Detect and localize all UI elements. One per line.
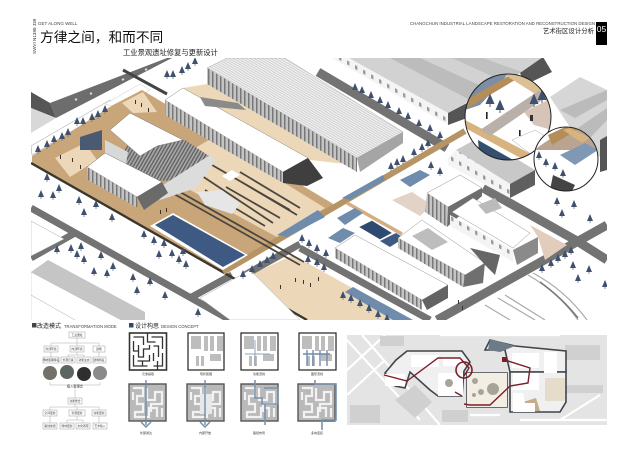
curved rails bottom right [485, 273, 587, 320]
concept row 2 captions: 路径布局 [253, 430, 265, 435]
grey hall upper right [330, 57, 552, 125]
flowchart: transformation mode: 工业遗址 [71, 333, 83, 337]
flowchart: transformation mode: 外部环境 [45, 347, 57, 351]
black boundary line [31, 163, 307, 320]
main reflecting pool [150, 213, 248, 270]
page number tab: 05 [597, 24, 606, 34]
long white-roof hall [165, 88, 323, 186]
plaza: tan ground [32, 90, 335, 272]
title: 方律之间，和而不同 [40, 30, 163, 45]
flowchart: transformation mode: 艺术植入 [94, 424, 106, 428]
flowchart: transformation mode: 功能更新 [93, 411, 105, 415]
white lattice over tracks [197, 190, 240, 214]
top-left building and facade [31, 58, 172, 155]
concept row 2 captions: 内部开放 [199, 430, 211, 435]
long south hall [335, 235, 448, 310]
flowchart: transformation mode [43, 332, 107, 429]
heading: design concept: DESIGN CONCEPT [161, 324, 199, 329]
flowchart: transformation mode: 文化再现 [77, 424, 89, 428]
heading: transformation mode: 改造模式 [37, 322, 61, 330]
hall with courtyard [398, 220, 500, 287]
plaza: pale sand areas [55, 84, 410, 320]
site plan: project boundary outlines [385, 340, 566, 412]
concept row 2 captions: 外部通达 [140, 430, 152, 435]
header: english project name: CHANGCHUN INDUSTRIAL LANDSCAPE RESTORATION AND RECONSTRUCTION DESIGN [410, 21, 595, 26]
site plan: round plaza features [445, 378, 499, 397]
flowchart: transformation mode: 场地肌理特征 [43, 358, 60, 362]
tan diagonal promenade [223, 131, 465, 272]
pair of small plaza halls and steel structure [80, 113, 216, 210]
header: english tagline: GET ALONG WELL [38, 21, 78, 26]
concept row 2: maze overlays and arrows [129, 380, 336, 430]
flowchart: transformation mode: 景观更新 [71, 411, 83, 415]
concept row 1 captions: 功能流线 [253, 371, 265, 376]
flowchart: transformation mode: 建筑 [96, 347, 102, 351]
heading: transformation mode: TRANSFORMATION MODE [64, 324, 117, 329]
flowchart: transformation mode: 路线重组 [44, 424, 56, 428]
heading: design concept: 设计构思 [135, 322, 159, 330]
heading: design concept [129, 322, 199, 330]
small steel-blue pools [277, 170, 430, 320]
rail tracks [167, 165, 304, 265]
panel: main isometric axonometric drawing [31, 57, 608, 323]
ground: white base [31, 58, 607, 320]
site plan: white building footprints [385, 352, 565, 412]
small people figures [60, 100, 463, 310]
header: vertical code: SWVI N1398 J39 [32, 18, 37, 54]
magnifier circle 1 [464, 74, 552, 160]
subtitle: 工业景观遗址修复与更新设计 [123, 48, 218, 57]
grey hall right edge [550, 77, 607, 172]
outlined white plots [31, 221, 300, 320]
flowchart: transformation mode: 内部环境 [71, 347, 83, 351]
flowchart: transformation mode: 功能整合 [69, 399, 81, 403]
site plan: red circulation route [384, 358, 530, 405]
bottom-left grey-roof building [31, 260, 145, 322]
flowchart: transformation mode: 场地更新 [61, 424, 73, 428]
flowchart: transformation mode: 功能业态 [78, 358, 90, 362]
corrugated large hall [207, 58, 403, 172]
header: chapter name: 艺术街区设计分析 [543, 26, 595, 35]
concept row 1 captions [142, 371, 323, 376]
white hall with skylight [450, 198, 567, 265]
grey hall centre right [448, 137, 535, 198]
three-storey block [425, 175, 482, 227]
flowchart: transformation mode: 景观元素 [62, 358, 74, 362]
concept row 1 captions: 元素提取 [142, 371, 154, 376]
flowchart: transformation mode: 空间更新 [44, 411, 56, 415]
magnifier circle 2 [534, 126, 598, 192]
pale pink courtyard [392, 192, 426, 216]
concept row 1: maze and plan diagrams [130, 333, 336, 370]
concept row 2 captions [140, 430, 323, 435]
concept row 2 captions: 多向连接 [311, 430, 323, 435]
flowchart: transformation mode: 植入新理念 [67, 384, 84, 388]
roads [31, 72, 607, 321]
concept row 1 captions: 图形流线 [311, 371, 323, 376]
concept row 1 captions: 现状肌理 [200, 371, 212, 376]
site plan [345, 335, 607, 425]
site plan: surrounding white streets [345, 335, 607, 425]
heading: transformation mode [32, 322, 117, 330]
tree groups [35, 57, 608, 323]
flowchart: four photo circles [43, 365, 107, 381]
flowchart: transformation mode: 建筑特征 [93, 358, 105, 362]
page number tab [596, 22, 607, 45]
